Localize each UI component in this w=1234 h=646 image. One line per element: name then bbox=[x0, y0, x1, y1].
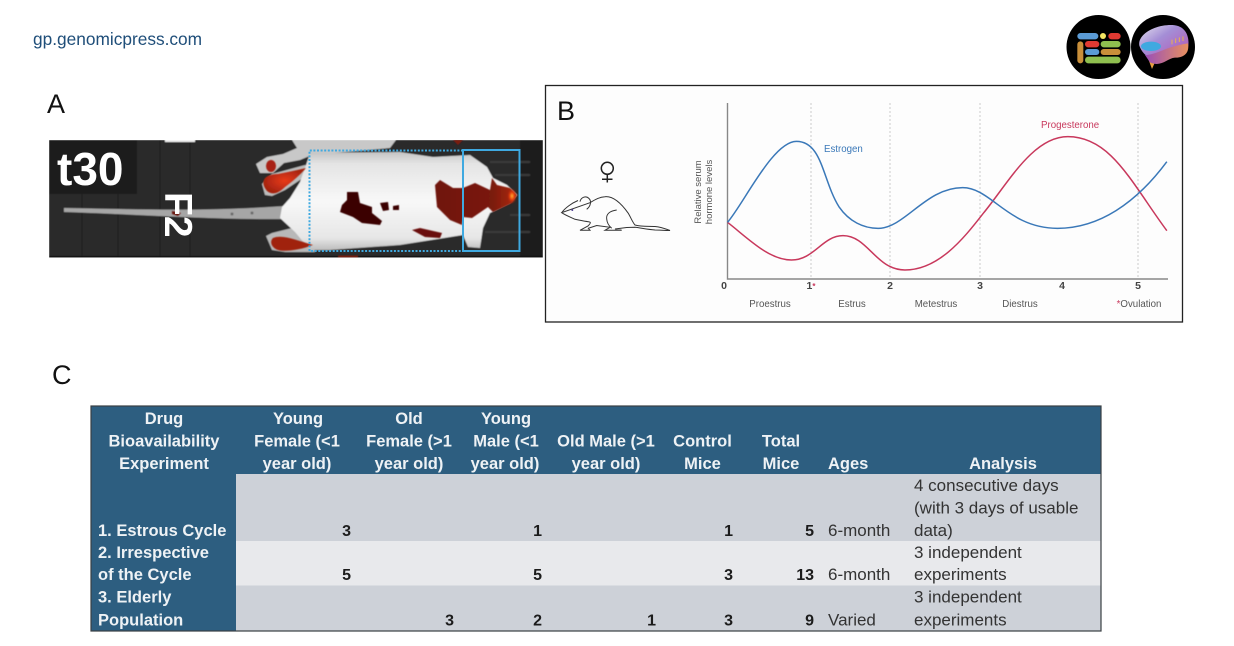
row 2: irrespective of the cycle: 3 independent bbox=[914, 543, 1022, 562]
fluorescence signal blobs bbox=[172, 140, 517, 258]
estrogen curve bbox=[728, 141, 1167, 228]
website url: gp.genomicpress.com bbox=[33, 29, 202, 49]
y axis title: Relative serum bbox=[693, 160, 704, 224]
cycle stage labels: Estrus bbox=[838, 299, 866, 310]
row 1: estrous cycle: 3 bbox=[342, 523, 351, 540]
mouse middle foot and leg bbox=[262, 165, 312, 196]
estrogen label: Estrogen bbox=[824, 144, 863, 155]
table header background bbox=[91, 406, 1101, 474]
row 3: elderly population: 3 independent bbox=[914, 588, 1022, 606]
header row: Female (>1 bbox=[366, 432, 452, 450]
mouse upper leg bbox=[256, 140, 396, 173]
panel label A: A bbox=[47, 89, 65, 119]
row 3: elderly population: 3 bbox=[445, 612, 454, 630]
row 2: irrespective of the cycle: 5 bbox=[533, 567, 542, 584]
header row: Old Male (>1 bbox=[557, 432, 655, 450]
row 3: elderly population: 9 bbox=[805, 612, 814, 630]
row 2: irrespective of the cycle: 6-month bbox=[828, 565, 890, 584]
header row: Analysis bbox=[969, 455, 1037, 473]
panel label C: C bbox=[52, 360, 72, 390]
mouse body bbox=[280, 152, 517, 250]
x axis numbers: 3 bbox=[977, 280, 983, 292]
header row: Old bbox=[395, 410, 423, 428]
row 1: estrous cycle: 1. Estrous Cycle bbox=[98, 522, 226, 540]
row 3: elderly population: Population bbox=[98, 612, 183, 630]
x axis numbers: 5 bbox=[1135, 280, 1141, 292]
header row: year old) bbox=[572, 455, 640, 473]
progesterone label: Progesterone bbox=[1041, 120, 1099, 131]
row 1: estrous cycle: 6-month bbox=[828, 521, 890, 540]
chart axes bbox=[728, 103, 1168, 279]
row 2: irrespective of the cycle: 5 bbox=[342, 567, 351, 584]
x axis numbers: 4 bbox=[1059, 280, 1065, 292]
row 1: estrous cycle bbox=[98, 476, 1078, 540]
row 3: elderly population bbox=[98, 588, 1022, 630]
header row: year old) bbox=[471, 455, 539, 473]
panel A: fluorescence image of mouse bbox=[49, 140, 543, 258]
mouse tail bbox=[64, 206, 285, 219]
x axis numbers: 0 bbox=[721, 280, 727, 292]
row 2: irrespective of the cycle: 3 bbox=[724, 567, 733, 584]
row 2: irrespective of the cycle: 13 bbox=[796, 567, 814, 584]
icon: mouse outline bbox=[562, 197, 670, 230]
header row: year old) bbox=[263, 455, 331, 473]
header row: year old) bbox=[375, 455, 443, 473]
row 1: estrous cycle: 4 consecutive days bbox=[914, 476, 1059, 495]
header row: Mice bbox=[684, 455, 721, 473]
cycle stage labels: *Ovulation bbox=[1117, 299, 1161, 310]
row 1: estrous cycle: data) bbox=[914, 521, 953, 540]
y axis title: hormone levels bbox=[704, 160, 715, 224]
row 3: elderly population: 2 bbox=[533, 612, 542, 630]
row 3: elderly population: 1 bbox=[647, 612, 656, 630]
icon: colored bars logo bbox=[1077, 33, 1121, 63]
header row: Young bbox=[273, 410, 323, 428]
region of interest boxes bbox=[310, 150, 463, 251]
x axis numbers bbox=[721, 280, 1141, 292]
header row: Male (<1 bbox=[473, 432, 539, 450]
image label t30: t30 bbox=[57, 143, 123, 195]
icon: female symbol bbox=[601, 162, 613, 182]
panel B: hormone cycle chart bbox=[546, 86, 1182, 322]
journal logos bbox=[1066, 15, 1195, 79]
x axis numbers: 2 bbox=[887, 280, 893, 292]
row 2: irrespective of the cycle bbox=[98, 543, 1022, 584]
first column background bbox=[91, 474, 236, 631]
header row bbox=[109, 410, 1037, 473]
row backgrounds bbox=[236, 474, 1101, 631]
panel C: experiment table bbox=[91, 406, 1101, 631]
progesterone curve bbox=[728, 137, 1167, 270]
header row: Control bbox=[673, 432, 732, 450]
row 3: elderly population: Varied bbox=[828, 610, 876, 630]
header row: Bioavailability bbox=[109, 432, 220, 450]
row 1: estrous cycle: 1 bbox=[533, 523, 542, 540]
row 1: estrous cycle: (with 3 days of usable bbox=[914, 498, 1078, 518]
mouse lower leg bbox=[266, 228, 315, 252]
header row: Experiment bbox=[119, 455, 209, 473]
row 3: elderly population: 3. Elderly bbox=[98, 588, 172, 606]
header row: Drug bbox=[145, 410, 183, 428]
cycle stage labels: Metestrus bbox=[915, 299, 957, 310]
header row: Young bbox=[481, 410, 531, 428]
row 2: irrespective of the cycle: of the Cycle bbox=[98, 566, 192, 584]
row 1: estrous cycle: 5 bbox=[805, 523, 814, 540]
cycle stage labels bbox=[749, 299, 1161, 310]
row 3: elderly population: experiments bbox=[914, 610, 1007, 630]
row 2: irrespective of the cycle: 2. Irrespective bbox=[98, 544, 209, 562]
row 1: estrous cycle: 1 bbox=[724, 523, 733, 540]
cycle stage labels: Diestrus bbox=[1002, 299, 1038, 310]
header row: Total bbox=[762, 432, 800, 450]
y axis title bbox=[693, 160, 715, 224]
panel label B: B bbox=[557, 96, 575, 126]
row 3: elderly population: 3 bbox=[724, 612, 733, 630]
header row: Ages bbox=[828, 455, 868, 473]
header row: Mice bbox=[763, 455, 799, 473]
x axis numbers: 1* bbox=[807, 280, 816, 292]
image label F2: F2 bbox=[156, 192, 199, 238]
row 2: irrespective of the cycle: experiments bbox=[914, 565, 1007, 584]
header row: Female (<1 bbox=[254, 432, 340, 450]
icon: brain logo bbox=[1139, 25, 1189, 69]
cycle stage labels: Proestrus bbox=[749, 299, 791, 310]
